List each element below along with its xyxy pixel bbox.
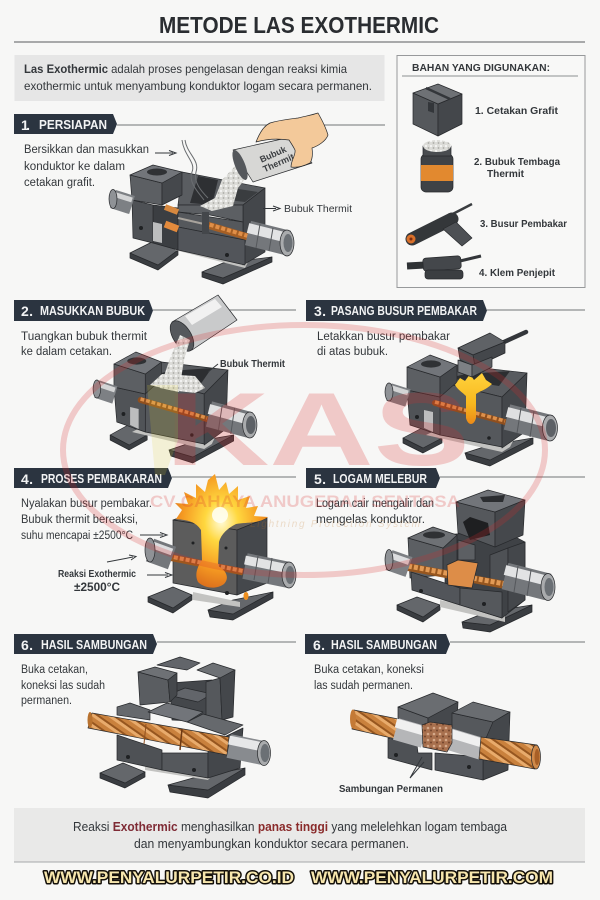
step heading: 2. [21,303,33,319]
step text: las sudah permanen. [314,680,413,692]
step heading: HASIL SAMBUNGAN [41,637,147,652]
step text: konduktor ke dalam [24,161,125,173]
step text [21,498,152,542]
step text: Buka cetakan, koneksi [314,664,424,676]
panel: 6. hasil sambungan right [305,634,585,795]
website footer: WWW.PENYALURPETIR.CO.ID [44,868,294,887]
step heading: LOGAM MELEBUR [333,471,427,486]
callout: conclusion: dan menyambungkan konduktor secara permanen. [134,837,409,851]
2. Bubuk Tembaga Thermit: Thermit [487,168,524,180]
step heading: 4. [21,471,33,487]
callout: permanent joint: Sambungan Permanen [339,783,443,795]
step heading [14,468,172,488]
step heading: 5. [314,471,326,487]
step heading [14,634,157,654]
watermark [63,325,545,575]
step text: koneksi las sudah [21,680,105,692]
step text: Letakkan busur pembakar [317,331,450,343]
illustration: mold [145,512,296,620]
fire [175,474,268,600]
watermark: KAS [165,372,470,488]
powder in mold [150,374,205,393]
reaction label: ±2500°C [74,582,120,594]
bubuk thermit label: Bubuk Thermit [220,359,286,370]
icon: graphite mold [413,84,462,136]
title: METODE LAS EXOTHERMIC [159,12,439,38]
illustration: mold with joined conductor [88,657,270,798]
bubuk thermit label: Bubuk Thermit [284,203,352,215]
panel: 2. masukkan bubuk [14,295,296,463]
step text [317,331,450,358]
step text: Tuangkan bubuk thermit [21,331,148,343]
panel: 5. logam melebur [306,468,585,632]
illustration: finished joint [350,693,540,780]
step heading: HASIL SAMBUNGAN [331,637,437,652]
panel: 3. pasang busur pembakar [306,300,585,466]
step heading [305,634,450,654]
step text: Nyalakan busur pembakar. [21,498,152,510]
step text: cetakan grafit. [24,177,95,189]
step heading [14,300,153,321]
step heading: 6. [21,637,33,653]
step heading [14,114,117,134]
website footer: WWW.PENYALURPETIR.COM [311,868,553,887]
icon: hand with packet: Thermit [261,152,296,174]
step heading: 1. [21,117,30,133]
icon: clamp [407,256,481,279]
panel: 6. hasil sambungan left [14,634,296,798]
3. Busur Pembakar: 3. Busur Pembakar [480,218,567,230]
step text: Buka cetakan, [21,664,88,676]
reaction label: Reaksi Exothermic [58,568,136,580]
step heading: PASANG BUSUR PEMBAKAR [331,303,477,318]
icon: torch [406,204,472,246]
icon: wire [182,140,208,200]
step text: di atas bubuk. [317,346,388,358]
step text [24,144,149,189]
step text [316,498,434,526]
step text: Logam cair mengalir dan [316,498,434,510]
bubuk thermit label [208,359,286,372]
arrow [155,150,176,156]
icon: hand with packet [229,113,328,182]
flame and molten drip [455,373,492,424]
2. Bubuk Tembaga Thermit: 2. Bubuk Tembaga [474,156,560,168]
step text: suhu mencapai ±2500°C [21,530,133,542]
step text: Bubuk thermit bereaksi, [21,514,138,526]
step text [314,664,424,692]
icon: pouring can [160,295,237,392]
step heading: MASUKKAN BUBUK [40,303,146,318]
step text: ke dalam cetakan. [21,346,112,358]
icon: powder stream [200,163,252,211]
step text: mengelas konduktor. [316,514,425,526]
step heading: PROSES PEMBAKARAN [41,471,162,486]
watermark: Lightning Protection System [250,519,420,530]
step text [21,664,105,707]
step text: permanen. [21,695,72,707]
illustration: mold [385,355,558,466]
illustration: open mold [385,490,555,632]
step heading [306,468,440,488]
intro text block: Las Exothermic adalah proses pengelasan dengan reaksi kimia [24,62,347,76]
icon: torch [458,332,526,377]
callout: conclusion [14,808,585,862]
step text: Bersikkan dan masukkan [24,144,149,156]
illustration: mold [109,165,294,284]
website footer [44,868,553,887]
step heading: 3. [314,303,326,319]
panel: 4. proses pembakaran [14,468,296,620]
arrows [107,532,172,578]
4. Klem Penjepit: 4. Klem Penjepit [479,267,555,279]
callout: permanent joint [339,757,443,795]
step text [21,331,148,358]
intro text block: exothermic untuk menyambung konduktor logam secara permanen. [24,79,372,93]
step heading: PERSIAPAN [39,117,107,132]
reaction label [58,568,136,594]
intro text block [14,55,384,101]
materials heading: BAHAN YANG DIGUNAKAN: [412,62,550,74]
illustration: mold [93,352,257,463]
callout: conclusion: Reaksi Exothermic menghasilkan panas tinggi yang melelehkan logam tembaga [73,820,507,834]
panel: materials [397,56,585,288]
icon: hand with packet: Bubuk [258,144,289,165]
step heading [306,300,487,321]
icon: thermit powder jar [421,140,453,192]
2. Bubuk Tembaga Thermit [474,156,560,180]
1. Cetakan Grafit: 1. Cetakan Grafit [475,105,558,117]
watermark: CV CAHAYA ANUGERAH SENTOSA [150,492,460,511]
step heading: 6. [313,637,325,653]
panel: 1. persiapan [14,113,385,284]
